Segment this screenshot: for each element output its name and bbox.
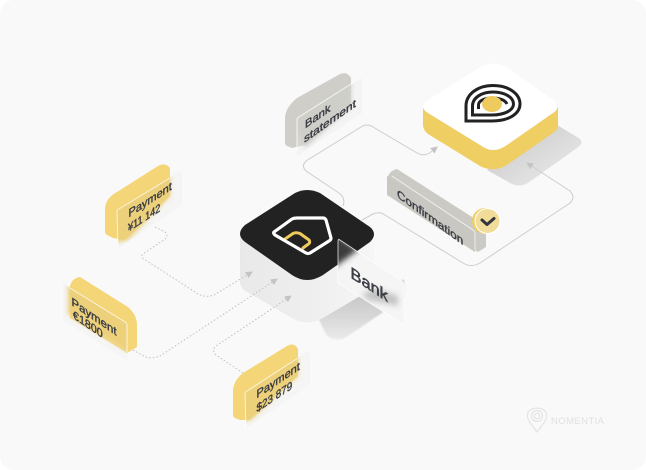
- label: Confirmation: Confirmation: [397, 186, 463, 248]
- card: bank statement: [285, 73, 356, 150]
- card: payment euro: [64, 277, 137, 354]
- connector: bank statement to platform: [304, 125, 437, 206]
- icon: nomentia logo: [466, 86, 520, 121]
- label: Payment: Payment: [72, 295, 117, 339]
- icon: pin: [527, 408, 547, 432]
- shadow of bank cube: [318, 280, 404, 340]
- cube sides: [240, 233, 374, 322]
- dotted connector: dollar payment: [214, 296, 291, 373]
- label: amount euro: €1800: [73, 308, 103, 342]
- card: confirmation: [387, 169, 486, 252]
- platform side: [423, 107, 558, 169]
- label: Payment: Payment: [256, 359, 301, 401]
- cube top: [240, 190, 374, 280]
- label: statement: statement: [304, 97, 357, 146]
- shadow of yellow platform: [487, 125, 582, 186]
- connector: bank confirmation to platform: [362, 163, 573, 266]
- bank cube: [240, 190, 374, 322]
- label: amount dollar: $23 879: [256, 379, 292, 415]
- dotted connector: euro payment: [133, 279, 277, 358]
- platform with logo: [423, 64, 558, 169]
- icon: house: [274, 218, 331, 254]
- wordmark: NOMENTIA: [551, 416, 605, 427]
- label: Bank: Bank: [305, 102, 331, 131]
- nomentia watermark: [527, 408, 605, 432]
- card: payment dollar: [233, 344, 302, 425]
- label: Bank: Bank: [350, 264, 389, 307]
- platform top: [423, 64, 558, 150]
- label: amount yen: ¥11 142: [127, 202, 160, 235]
- card: payment yen: [105, 164, 174, 246]
- glass card: bank: [338, 238, 404, 312]
- icon: check badge: [472, 208, 500, 234]
- label: Payment: Payment: [128, 180, 173, 220]
- dotted connector: yen payment: [142, 227, 252, 296]
